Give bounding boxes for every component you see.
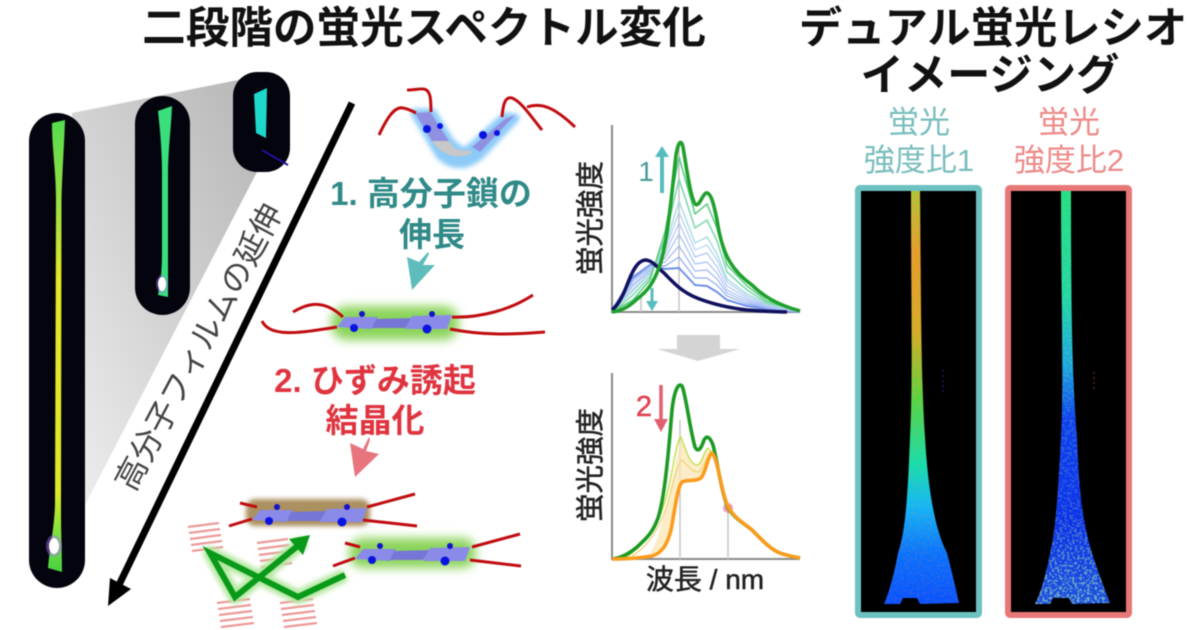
pink marker <box>723 503 733 513</box>
label: fluorescence ratio 1 <box>864 105 974 178</box>
panel: ratio image 1 <box>858 188 979 615</box>
y axis label: 蛍光強度 <box>575 161 607 275</box>
arrow down with 2: 2 <box>636 391 652 423</box>
arrow down with 2 <box>636 385 668 432</box>
orange curve: after crystallization <box>612 453 800 559</box>
light path arrow <box>210 535 345 597</box>
crystal lamellae <box>188 523 317 627</box>
intermediate spectra <box>625 437 712 558</box>
series fill between curves <box>650 437 712 555</box>
navy curve: initial spectrum <box>612 260 787 312</box>
chart: spectra for step 1 <box>575 125 800 312</box>
panel: ratio image 2 <box>1008 188 1129 615</box>
speckle <box>1035 191 1110 604</box>
molecule: folded chain with blue glow <box>379 89 575 164</box>
label: step 2 strain-induced crystallization: 結晶化 <box>326 402 424 439</box>
arrow down <box>646 288 658 311</box>
film capsule: unstretched <box>233 72 290 172</box>
label: fluorescence ratio 2 <box>1014 105 1124 178</box>
label: fluorescence ratio 2: 強度比2 <box>1014 143 1124 178</box>
film ratio map 1 <box>884 191 959 604</box>
molecule: extended chain near crystal <box>333 534 521 568</box>
projection fan <box>72 78 258 505</box>
label: step 2 strain-induced crystallization: 2. ひずみ誘起 <box>274 362 476 399</box>
label: fluorescence ratio 2: 蛍光 <box>1038 105 1100 140</box>
title: dual fluorescence ratio imaging: デュアル蛍光レシオ <box>799 4 1187 53</box>
film capsule: mid stretched <box>135 96 190 315</box>
chart: spectra for step 2 <box>575 373 800 595</box>
arrow: step 1 <box>407 252 435 290</box>
label: fluorescence ratio 1: 強度比1 <box>864 143 974 178</box>
panel: stretched film photographs <box>29 72 290 588</box>
label: polymer film stretching: 高分子フィルムの延伸 <box>108 198 290 496</box>
film capsule: fully stretched <box>29 113 85 588</box>
title: dual fluorescence ratio imaging <box>799 4 1187 100</box>
arrow up with 1 <box>638 146 669 193</box>
arrow: step 2 <box>350 437 379 477</box>
stray signal <box>942 370 944 392</box>
molecule: extended chain with green glow <box>262 295 545 340</box>
spectra series <box>612 157 800 312</box>
arrow up with 1: 1 <box>638 156 654 187</box>
molecule: crystallized chain with brown glow <box>229 494 417 526</box>
title: two-stage fluorescence change: 二段階の蛍光スペクトル変化 <box>142 5 706 53</box>
green curve: before crystallization <box>612 385 800 559</box>
label: step 1 polymer chain extension: 1. 高分子鎖の <box>330 175 532 212</box>
arrow: grey between charts <box>657 335 740 361</box>
axes <box>612 125 800 312</box>
film ratio map 2 <box>1035 191 1110 604</box>
label: step 1 polymer chain extension <box>330 175 532 253</box>
arrow: film stretching direction <box>108 103 352 606</box>
panel: molecular schematic <box>188 89 575 627</box>
label: step 1 polymer chain extension: 伸長 <box>399 216 465 253</box>
label: fluorescence ratio 1: 蛍光 <box>888 105 950 140</box>
axes <box>612 373 800 559</box>
green curve: stretched spectrum <box>612 142 800 312</box>
speckle <box>884 191 959 604</box>
x axis label: 波長 / nm <box>646 564 764 595</box>
title: dual fluorescence ratio imaging: イメージング <box>861 52 1119 100</box>
label: step 2 strain-induced crystallization <box>274 362 476 439</box>
stray signal <box>1093 372 1095 392</box>
y axis label: 蛍光強度 <box>575 408 607 522</box>
